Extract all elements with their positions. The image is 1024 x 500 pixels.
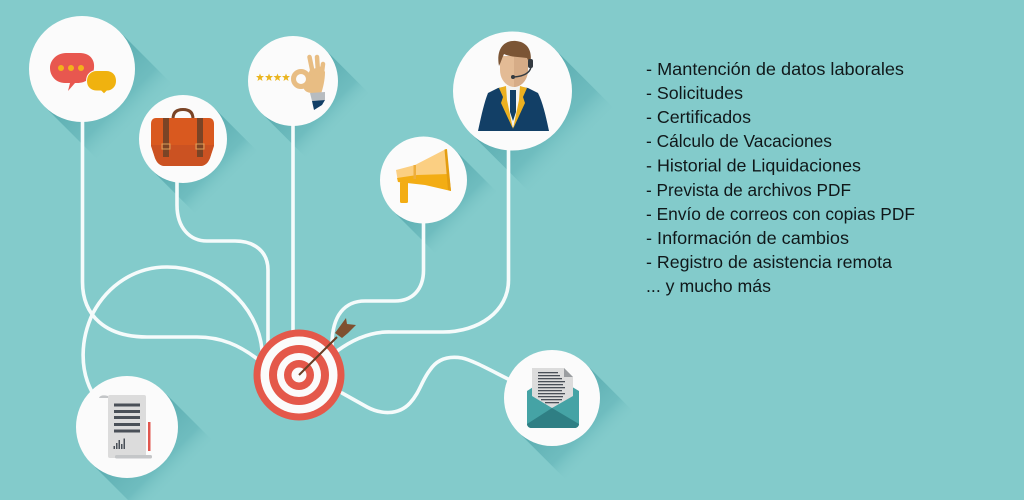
feature list: - Historial de Liquidaciones [646, 156, 861, 176]
connector lines [82, 118, 510, 413]
feature list: - Registro de asistencia remota [646, 252, 892, 272]
feature list: - Información de cambios [646, 228, 849, 248]
icon: open envelope with letter [504, 350, 600, 446]
icon: speech bubbles [29, 16, 135, 122]
target with arrow [254, 318, 356, 420]
feature list: ... y mucho más [646, 276, 771, 296]
icon: briefcase [139, 95, 227, 183]
feature list [646, 59, 915, 296]
feature list: - Cálculo de Vacaciones [646, 131, 832, 151]
feature list: - Envío de correos con copias PDF [646, 204, 915, 224]
icon: document with pen [76, 376, 178, 478]
feature list: - Mantención de datos laborales [646, 59, 904, 79]
icon: five-star rating with OK hand [248, 36, 338, 126]
icon: megaphone [380, 136, 467, 224]
feature list: - Certificados [646, 107, 751, 127]
feature list: - Solicitudes [646, 83, 743, 103]
feature list: - Prevista de archivos PDF [646, 180, 851, 200]
icon: agent with headset [453, 32, 572, 150]
